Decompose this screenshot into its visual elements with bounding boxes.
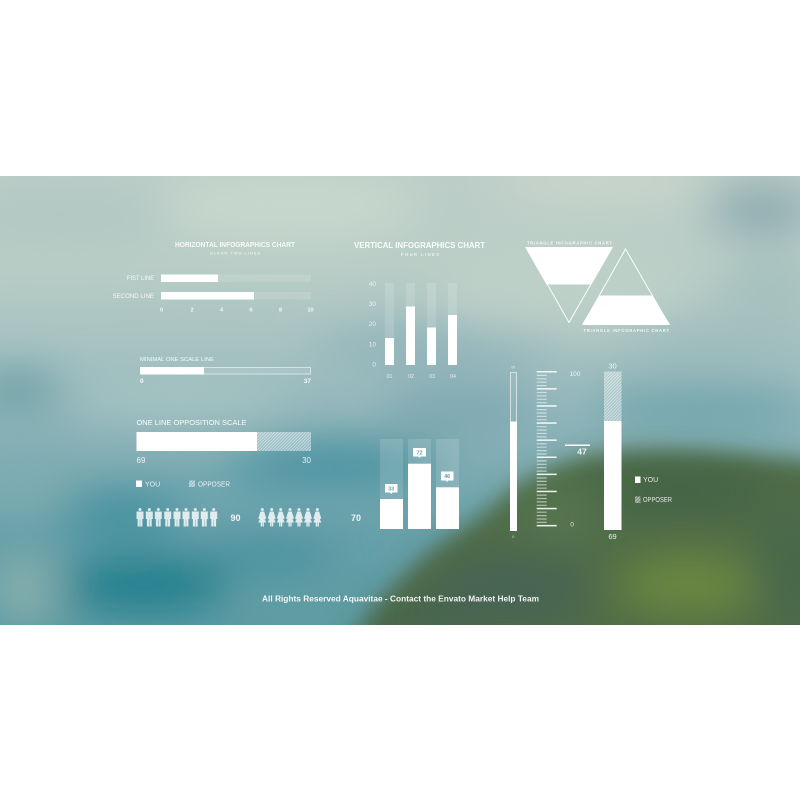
panel: three bar chart with callouts: [380, 439, 459, 529]
footer credit: All Rights Reserved Aquavitae - Contact the Envato Market Help Team: [262, 594, 539, 604]
axis labels: 6: [249, 308, 253, 314]
opposer hatch segment: [604, 372, 622, 421]
thermometer outline: [510, 372, 516, 530]
value: 70: 70: [351, 513, 361, 523]
major ticks: [537, 371, 557, 526]
legend: opposer: [635, 496, 672, 504]
upright triangle fill: [582, 296, 670, 324]
marker value: 47: 47: [577, 446, 587, 456]
y axis labels: 20: [369, 321, 376, 328]
panel: vertical infographics chart: [354, 240, 486, 380]
bar fill: first line: [161, 274, 218, 282]
panel: ruler scale: [537, 371, 590, 528]
axis labels: 10: [307, 308, 314, 314]
callout: 33: 33: [388, 486, 394, 492]
legend: you: YOU: [145, 482, 160, 488]
opposer hatch segment: [257, 432, 311, 451]
row label: first line: FIST LINE: [127, 275, 154, 282]
legend: you: [136, 480, 160, 488]
icon row: women pictogram: [258, 508, 321, 526]
bar fill: second line: [161, 292, 254, 300]
y axis labels: [369, 281, 376, 368]
x axis labels: 02: [408, 374, 414, 380]
row label: second line: SECOND LINE: [112, 293, 154, 300]
scale label: 100: 100: [570, 371, 581, 378]
heading: triangle bottom: TRIANGLE INFOGRAPHIC CHART: [584, 328, 669, 333]
heading: opposition scale: ONE LINE OPPOSITION SCALE: [136, 418, 247, 427]
scale fill: [140, 367, 204, 374]
heading: vertical chart: VERTICAL INFOGRAPHICS CHART: [354, 240, 486, 250]
bar tracks: [385, 283, 457, 365]
you white segment: [604, 421, 622, 530]
thermometer bottom label: 0: [512, 534, 515, 539]
legend: you: [635, 476, 658, 484]
bar fills: [380, 464, 459, 529]
upright triangle outline: [583, 249, 669, 324]
scale end value: 37: [304, 378, 311, 385]
value: 69: 69: [136, 456, 146, 465]
callout: 46: 46: [444, 474, 450, 480]
blurred photo background: [0, 166, 800, 650]
subheading: clean two lines: CLEAN TWO LINES: [210, 250, 260, 256]
icon row: men pictogram: [136, 508, 217, 526]
panel: one line opposition scale: [136, 418, 312, 488]
thermometer top label: 69: [511, 366, 515, 370]
heading: minimal scale: MINIMAL ONE SCALE LINE: [140, 357, 214, 363]
panel: vertical opposition bar: [604, 362, 672, 541]
axis labels: 2: [190, 308, 194, 314]
panel: thermometer bar: [510, 366, 517, 539]
bar track: first line: [161, 274, 311, 282]
axis labels: 0: [160, 308, 163, 314]
x axis labels: 03: [429, 374, 435, 380]
bar fills: [385, 306, 457, 365]
legend: you: YOU: [643, 477, 658, 484]
axis labels: [160, 308, 314, 314]
y axis labels: 30: [369, 301, 376, 308]
legend: opposer: [189, 480, 230, 488]
value: 90: 90: [230, 513, 241, 523]
axis labels: 8: [279, 308, 282, 314]
y axis labels: 40: [369, 281, 376, 288]
x axis labels: [387, 374, 456, 380]
panel: horizontal infographics chart: [112, 242, 314, 314]
minor ticks: [537, 375, 547, 522]
legend: opposer: OPPOSER: [643, 497, 672, 504]
value: 69: 69: [608, 532, 617, 541]
scale label: 0: 0: [570, 522, 574, 528]
x axis labels: 04: [450, 374, 456, 380]
bar tracks: [380, 439, 459, 529]
x axis labels: 01: [387, 374, 392, 380]
y axis labels: 0: [372, 362, 376, 368]
bar track: second line: [161, 292, 311, 300]
heading: triangle top: TRIANGLE INFOGRAPHIC CHART: [527, 240, 612, 246]
thermometer fill: [510, 422, 517, 531]
scale outline: [140, 368, 310, 374]
value: 30: 30: [302, 456, 312, 465]
marker line: [565, 444, 590, 446]
inverted triangle outline: [526, 248, 612, 322]
value: 30: 30: [608, 362, 617, 370]
inverted triangle fill: [525, 247, 613, 284]
legend: opposer: OPPOSER: [198, 482, 230, 488]
heading: horizontal chart: HORIZONTAL INFOGRAPHICS CHART: [175, 242, 296, 249]
you white segment: [136, 432, 257, 451]
axis labels: 4: [220, 308, 224, 314]
subheading: four lines: FOUR LINES: [401, 252, 439, 257]
callout: 72: 72: [416, 450, 422, 456]
panel: triangle infographic charts: [525, 240, 670, 333]
scale start value: 0: [140, 378, 144, 385]
y axis labels: 10: [369, 342, 376, 348]
panel: minimal one scale line: [140, 357, 311, 385]
